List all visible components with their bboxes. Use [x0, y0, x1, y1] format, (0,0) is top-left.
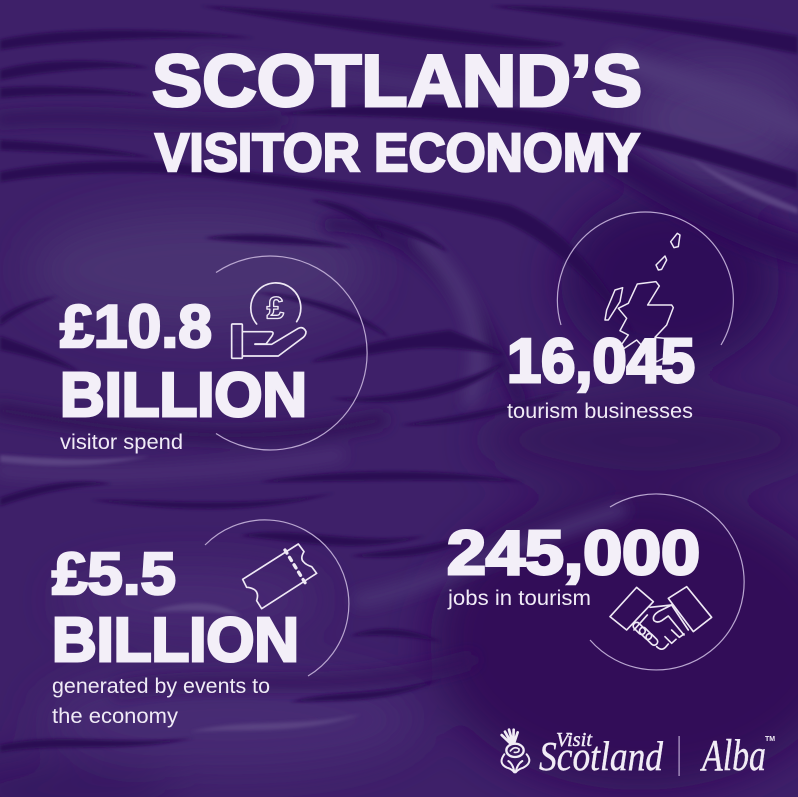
icon: ticket [243, 544, 317, 609]
logo text: Visit: Visit [556, 729, 592, 751]
arc: jobs [590, 494, 744, 670]
stat: 245,000: 245,000 [447, 519, 700, 588]
label: jobs in tourism: jobs in tourism [447, 587, 591, 610]
label: visitor spend: visitor spend [60, 431, 183, 454]
stat: £5.5: £5.5 [52, 541, 176, 607]
logo text: trademark: TM [765, 736, 775, 743]
stat: 16,045: 16,045 [507, 327, 695, 396]
icon: thistle [502, 730, 529, 772]
logo text: Alba: Alba [700, 731, 766, 780]
label: tourism businesses: tourism businesses [507, 400, 693, 423]
logo divider [678, 736, 680, 776]
arc: events [205, 520, 349, 676]
icon: map of Scotland [605, 233, 680, 362]
title: Scotland's: SCOTLAND’S [152, 41, 642, 122]
stat: billion: BILLION [52, 606, 299, 675]
title: visitor economy: VISITOR ECONOMY [155, 123, 640, 183]
arc: visitor spend [216, 256, 367, 450]
icon: handshake [610, 587, 712, 649]
label: generated by events: generated by events to [52, 675, 270, 698]
stat: billion: BILLION [60, 361, 307, 430]
stat: £10.8: £10.8 [60, 293, 212, 360]
arc: tourism businesses [557, 212, 733, 345]
logo: VisitScotland Alba [502, 729, 775, 780]
icon: hand holding pound coin [232, 283, 306, 358]
icon: hand holding pound coin: £ [267, 291, 285, 326]
label: generated by events: the economy [52, 705, 179, 728]
logo text: Scotland: Scotland [539, 733, 663, 779]
label: generated by events [52, 675, 270, 728]
